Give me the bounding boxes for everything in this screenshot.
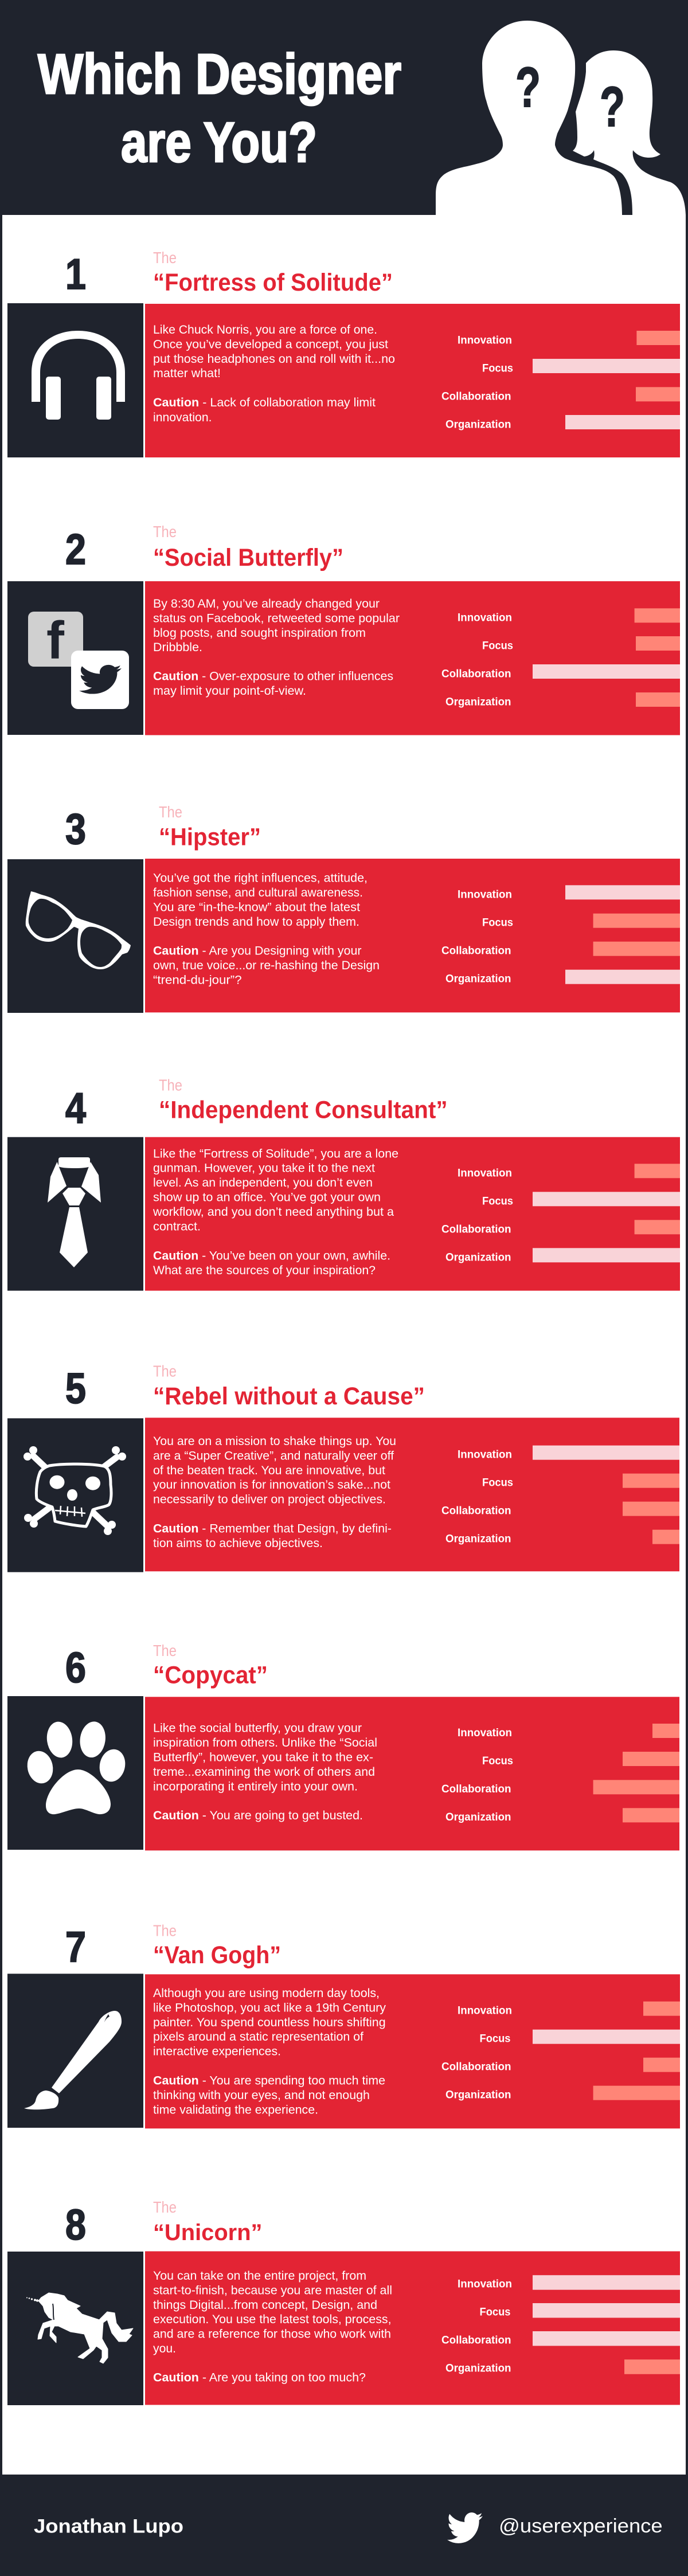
heading: “Unicorn”	[153, 2220, 263, 2245]
red panel	[145, 859, 680, 1012]
number 6: 6	[65, 1643, 86, 1692]
bar chart: Innovation	[458, 2005, 512, 2017]
bar chart: Collaboration	[441, 668, 511, 680]
description text: You are on a mission to shake things up. You	[153, 1434, 396, 1448]
number 2: 2	[65, 525, 86, 573]
icon: paint brush	[24, 2011, 122, 2109]
icon: two head silhouettes with question marks: ?	[600, 75, 625, 138]
author name: Jonathan Lupo	[34, 2515, 183, 2537]
bar chart: Focus	[482, 1195, 513, 1207]
bar chart: Focus	[482, 917, 513, 929]
description text: matter what!	[153, 366, 221, 380]
description text: thinking with your eyes, and not enough	[153, 2088, 370, 2102]
bar chart: Collaboration	[441, 1223, 511, 1235]
heading: “Hipster”	[159, 824, 261, 851]
bar chart: Focus	[482, 640, 513, 652]
the label: The	[153, 2198, 177, 2216]
description text: of the beaten track. You are innovative, but	[153, 1463, 385, 1477]
bar chart: Organization	[445, 696, 511, 708]
description text: workflow, and you don’t need anything but a	[153, 1205, 394, 1219]
description text: may limit your point-of-view.	[153, 684, 306, 698]
description text: like Photoshop, you act like a 19th Century	[153, 2000, 386, 2014]
description text: You are “in-the-know” about the latest	[153, 900, 360, 914]
heading: “Social Butterfly”	[153, 544, 343, 571]
description text: interactive experiences.	[153, 2045, 281, 2058]
heading: “Rebel without a Cause”	[153, 1383, 425, 1410]
bar chart: Organization	[445, 2363, 511, 2375]
icon: two head silhouettes with question marks: ?	[515, 56, 541, 119]
heading: “Independent Consultant”	[159, 1097, 448, 1124]
bar chart: Organization	[445, 1533, 511, 1545]
description text: Caution - Are you Designing with your	[153, 944, 361, 958]
number 5: 5	[65, 1364, 86, 1412]
description text: necessarily to deliver on project objectives.	[153, 1493, 386, 1506]
bar chart: Organization	[445, 973, 511, 985]
number 1: 1	[65, 250, 86, 298]
section 2: Social Butterfly	[7, 523, 680, 735]
description text: What are the sources of your inspiration?	[153, 1263, 376, 1277]
icon panel	[7, 1418, 143, 1572]
description text: show up to an office. You’ve got your own	[153, 1190, 381, 1204]
bar chart: Innovation	[458, 2279, 512, 2291]
description text: By 8:30 AM, you’ve already changed your	[153, 597, 380, 610]
bar chart	[441, 2002, 680, 2101]
bar chart: Collaboration	[441, 1505, 511, 1517]
description text	[153, 1146, 398, 1277]
description text: Caution - You are spending too much time	[153, 2074, 385, 2088]
icon: unicorn	[26, 2293, 133, 2363]
section 8: Unicorn	[7, 2198, 680, 2405]
description text: you.	[153, 2342, 176, 2355]
bar chart	[441, 608, 680, 708]
bar chart: Focus	[479, 2307, 510, 2319]
description text: execution. You use the latest tools, process,	[153, 2312, 391, 2326]
description text: own, true voice...or re-hashing the Design	[153, 958, 380, 972]
description text: blog posts, and sought inspiration from	[153, 626, 366, 640]
section 4: Independent Consultant	[7, 1076, 680, 1291]
heading: “Copycat”	[153, 1662, 268, 1689]
footer	[34, 2512, 663, 2543]
the label: The	[159, 803, 182, 821]
the label: The	[153, 1921, 177, 1939]
bar chart: Collaboration	[441, 391, 511, 402]
section 7: Van Gogh	[7, 1921, 680, 2128]
description text	[153, 1721, 377, 1822]
description text	[153, 1986, 386, 2116]
description text: pixels around a static representation of	[153, 2030, 363, 2043]
description text: Caution - Remember that Design, by defini-	[153, 1521, 392, 1535]
description text: Like the social butterfly, you draw your	[153, 1721, 362, 1735]
red panel	[145, 1974, 680, 2128]
description text: put those headphones on and roll with it...no	[153, 352, 395, 366]
icon: glasses	[26, 891, 131, 969]
the label: The	[153, 523, 177, 541]
description text: painter. You spend countless hours shifting	[153, 2015, 386, 2029]
description text: are a “Super Creative”, and naturally veer off	[153, 1448, 394, 1462]
bar chart: Focus	[482, 1755, 513, 1767]
bar chart	[441, 331, 680, 431]
description text	[153, 871, 380, 987]
section 5: Rebel without a Cause	[7, 1363, 679, 1572]
bar chart: Focus	[479, 2033, 510, 2045]
description text: Once you’ve developed a concept, you just	[153, 337, 388, 351]
description text: contract.	[153, 1219, 201, 1233]
description text: gunman. However, you take it to the next	[153, 1161, 375, 1175]
icon: facebook and twitter tiles	[28, 610, 129, 709]
red panel	[145, 1697, 679, 1850]
description text: Caution - You are going to get busted.	[153, 1808, 363, 1822]
title: are You?	[121, 111, 317, 174]
description text: your innovation is for innovation’s sake...not	[153, 1478, 390, 1491]
section 1: Fortress of Solitude	[7, 249, 680, 457]
red panel	[145, 2252, 680, 2405]
bar chart	[441, 1446, 679, 1545]
description text: fashion sense, and cultural awareness.	[153, 886, 363, 899]
description text: “trend-du-jour”?	[153, 973, 242, 987]
bar chart: Innovation	[458, 889, 512, 901]
red panel	[145, 581, 680, 735]
icon panel	[7, 1974, 143, 2128]
icon: paw print	[25, 1720, 128, 1814]
icon panel	[7, 2252, 143, 2405]
bar chart	[441, 1164, 680, 1263]
number 4: 4	[65, 1084, 86, 1132]
description text: and are a reference for those who work with	[153, 2327, 391, 2341]
bar chart: Collaboration	[441, 2335, 511, 2347]
description text	[153, 1434, 396, 1550]
description text: Dribbble.	[153, 640, 202, 654]
description text: tion aims to achieve objectives.	[153, 1536, 323, 1550]
red panel	[145, 304, 680, 457]
title	[38, 42, 401, 174]
description text: Caution - Are you taking on too much?	[153, 2371, 366, 2385]
twitter handle: @userexperience	[499, 2515, 663, 2537]
description text: things Digital...from concept, Design, and	[153, 2298, 377, 2312]
section 3: Hipster	[7, 803, 680, 1013]
description text: Although you are using modern day tools,	[153, 1986, 380, 2000]
bar chart	[441, 885, 680, 985]
icon panel	[7, 303, 143, 457]
bar chart: Innovation	[458, 335, 512, 346]
bar chart: Innovation	[458, 1167, 512, 1179]
icon: tie and collar	[48, 1157, 101, 1267]
red panel	[145, 1418, 679, 1571]
description text: Design trends and how to apply them.	[153, 915, 359, 929]
bar chart: Innovation	[458, 612, 512, 624]
description text	[153, 323, 395, 424]
number 7: 7	[65, 1923, 86, 1971]
bar chart: Organization	[445, 418, 511, 431]
description text: treme...examining the work of others and	[153, 1765, 375, 1779]
bar chart: Organization	[445, 1811, 511, 1823]
description text	[153, 2269, 392, 2385]
icon panel	[7, 581, 143, 735]
bar chart	[441, 1724, 679, 1823]
red panel	[145, 1137, 680, 1291]
description text: Caution - Lack of collaboration may limit	[153, 396, 376, 409]
the label: The	[153, 1363, 177, 1380]
description text: Like the “Fortress of Solitude”, you are a lone	[153, 1146, 398, 1160]
description text: start-to-finish, because you are master of all	[153, 2283, 392, 2297]
the label: The	[159, 1076, 182, 1094]
icon: skull and crossbones	[24, 1446, 126, 1535]
description text: level. As an independent, you don’t even	[153, 1176, 373, 1189]
bar chart: Innovation	[458, 1727, 512, 1739]
bar chart: Organization	[445, 2089, 511, 2101]
header	[38, 21, 686, 215]
description text: Caution - You’ve been on your own, awhile.	[153, 1249, 390, 1263]
section 6: Copycat	[7, 1642, 679, 1850]
icon panel	[7, 1137, 143, 1291]
heading: “Van Gogh”	[153, 1941, 281, 1969]
bar chart: Organization	[445, 1251, 511, 1263]
bar chart: Focus	[482, 1477, 513, 1489]
description text: incorporating it entirely into your own.	[153, 1779, 358, 1793]
description text: Like Chuck Norris, you are a force of one.	[153, 323, 377, 336]
icon panel	[7, 859, 143, 1013]
number 8: 8	[65, 2201, 86, 2249]
the label: The	[153, 249, 177, 267]
icon: twitter bird	[447, 2512, 483, 2543]
description text: innovation.	[153, 410, 212, 424]
description text: status on Facebook, retweeted some popular	[153, 611, 400, 625]
description text: You’ve got the right influences, attitude,	[153, 871, 368, 885]
description text: Caution - Over-exposure to other influences	[153, 670, 393, 683]
description text: Butterfly”, however, you take it to the ex-	[153, 1751, 373, 1764]
heading: “Fortress of Solitude”	[153, 269, 393, 296]
icon: headphones	[32, 331, 125, 420]
number 3: 3	[65, 805, 86, 853]
bar chart: Collaboration	[441, 945, 511, 957]
bar chart: Focus	[482, 362, 513, 375]
the label: The	[153, 1642, 177, 1659]
icon: facebook and twitter tiles: f	[46, 610, 65, 670]
icon: two head silhouettes with question marks	[436, 21, 686, 215]
title: Which Designer	[38, 42, 401, 105]
description text: time validating the experience.	[153, 2103, 318, 2116]
bar chart: Innovation	[458, 1448, 512, 1461]
description text	[153, 597, 400, 698]
bar chart: Collaboration	[441, 1783, 511, 1795]
description text: You can take on the entire project, from	[153, 2269, 366, 2283]
bar chart: Collaboration	[441, 2061, 511, 2073]
icon panel	[7, 1696, 143, 1850]
bar chart	[441, 2275, 680, 2375]
description text: inspiration from others. Unlike the “Social	[153, 1736, 377, 1749]
